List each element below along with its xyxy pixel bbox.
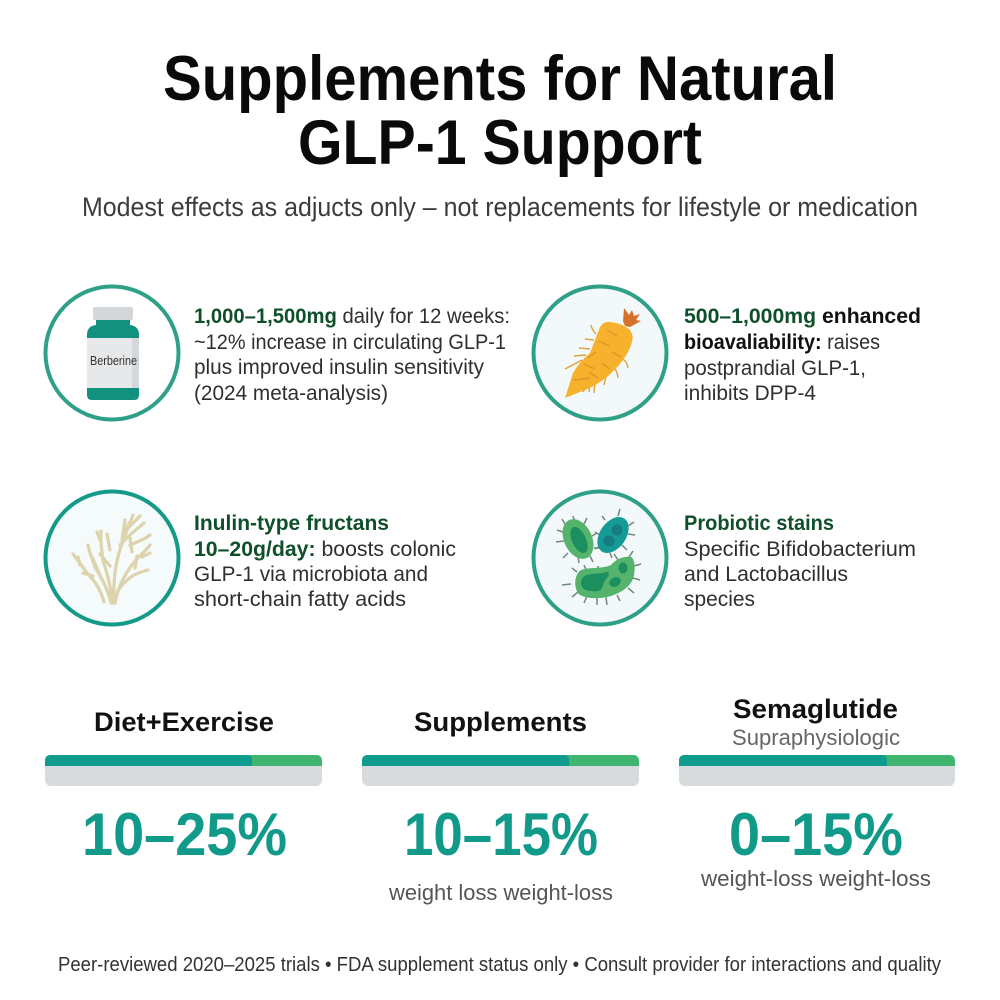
value: 0–15%	[729, 801, 903, 868]
text: berberine dose: (2024 meta-analysis)	[194, 381, 388, 405]
panel: supplements	[362, 707, 639, 905]
text: inulin dose: Inulin-type fructans	[194, 511, 389, 535]
text: probiotic strains: Probiotic stains	[684, 511, 834, 535]
title: GLP-1 Support	[298, 108, 702, 178]
progress bar	[362, 755, 639, 786]
text: berberine dose: 1,000–1,500mg daily for 12 weeks:	[194, 304, 510, 328]
panel: curcumin root	[534, 286, 921, 420]
panel: berberine	[46, 286, 510, 420]
text: berberine dose: plus improved insulin sensitivity	[194, 355, 484, 379]
value: 10–15%	[404, 801, 598, 868]
panel: diet and exercise	[45, 707, 322, 868]
icon: berberine bottle: Berberine	[90, 354, 137, 368]
text: probiotic strains	[684, 511, 916, 611]
subtitle: Modest effects as adjucts only – not replacements for lifestyle or medication	[82, 192, 918, 222]
text: probiotic strains: and Lactobacillus	[684, 562, 848, 586]
text: root dose: postprandial GLP-1,	[684, 356, 866, 380]
heading: Supplements	[414, 707, 587, 737]
panel: probiotics	[534, 492, 916, 624]
text: berberine dose	[194, 304, 510, 405]
icon: golden root	[534, 286, 666, 420]
text: inulin dose: 10–20g/day: boosts colonic	[194, 537, 456, 561]
text: inulin dose: GLP-1 via microbiota and	[194, 562, 428, 586]
panel: semaglutide	[679, 694, 955, 891]
value: 10–25%	[82, 801, 287, 868]
text: root dose: 500–1,000mg enhanced	[684, 304, 921, 328]
caption: weight-loss weight-loss	[700, 866, 931, 891]
text: inulin dose	[194, 511, 456, 611]
text: probiotic strains: species	[684, 587, 755, 611]
title: Supplements for Natural	[163, 44, 837, 114]
text: berberine dose: ~12% increase in circulating GLP-1	[194, 330, 506, 354]
footer: Peer-reviewed 2020–2025 trials • FDA supplement status only • Consult provider for interactions and quality	[58, 954, 941, 976]
panel: inulin	[46, 492, 456, 624]
text: root dose: inhibits DPP-4	[684, 381, 816, 405]
heading: Semaglutide	[733, 694, 898, 724]
text: root dose	[684, 304, 921, 405]
subheading: Supraphysiologic	[732, 725, 900, 750]
progress bar	[679, 755, 955, 786]
icon: berberine bottle	[46, 286, 178, 420]
icon: bacteria	[534, 492, 666, 624]
caption: weight loss weight-loss	[388, 880, 613, 905]
text: inulin dose: short-chain fatty acids	[194, 587, 406, 611]
text: probiotic strains: Specific Bifidobacterium	[684, 537, 916, 561]
text: root dose: bioavaliability: raises	[684, 330, 880, 354]
icon: inulin fibres	[46, 492, 178, 624]
progress bar	[45, 755, 322, 786]
title	[163, 44, 837, 178]
heading: Diet+Exercise	[94, 707, 274, 737]
